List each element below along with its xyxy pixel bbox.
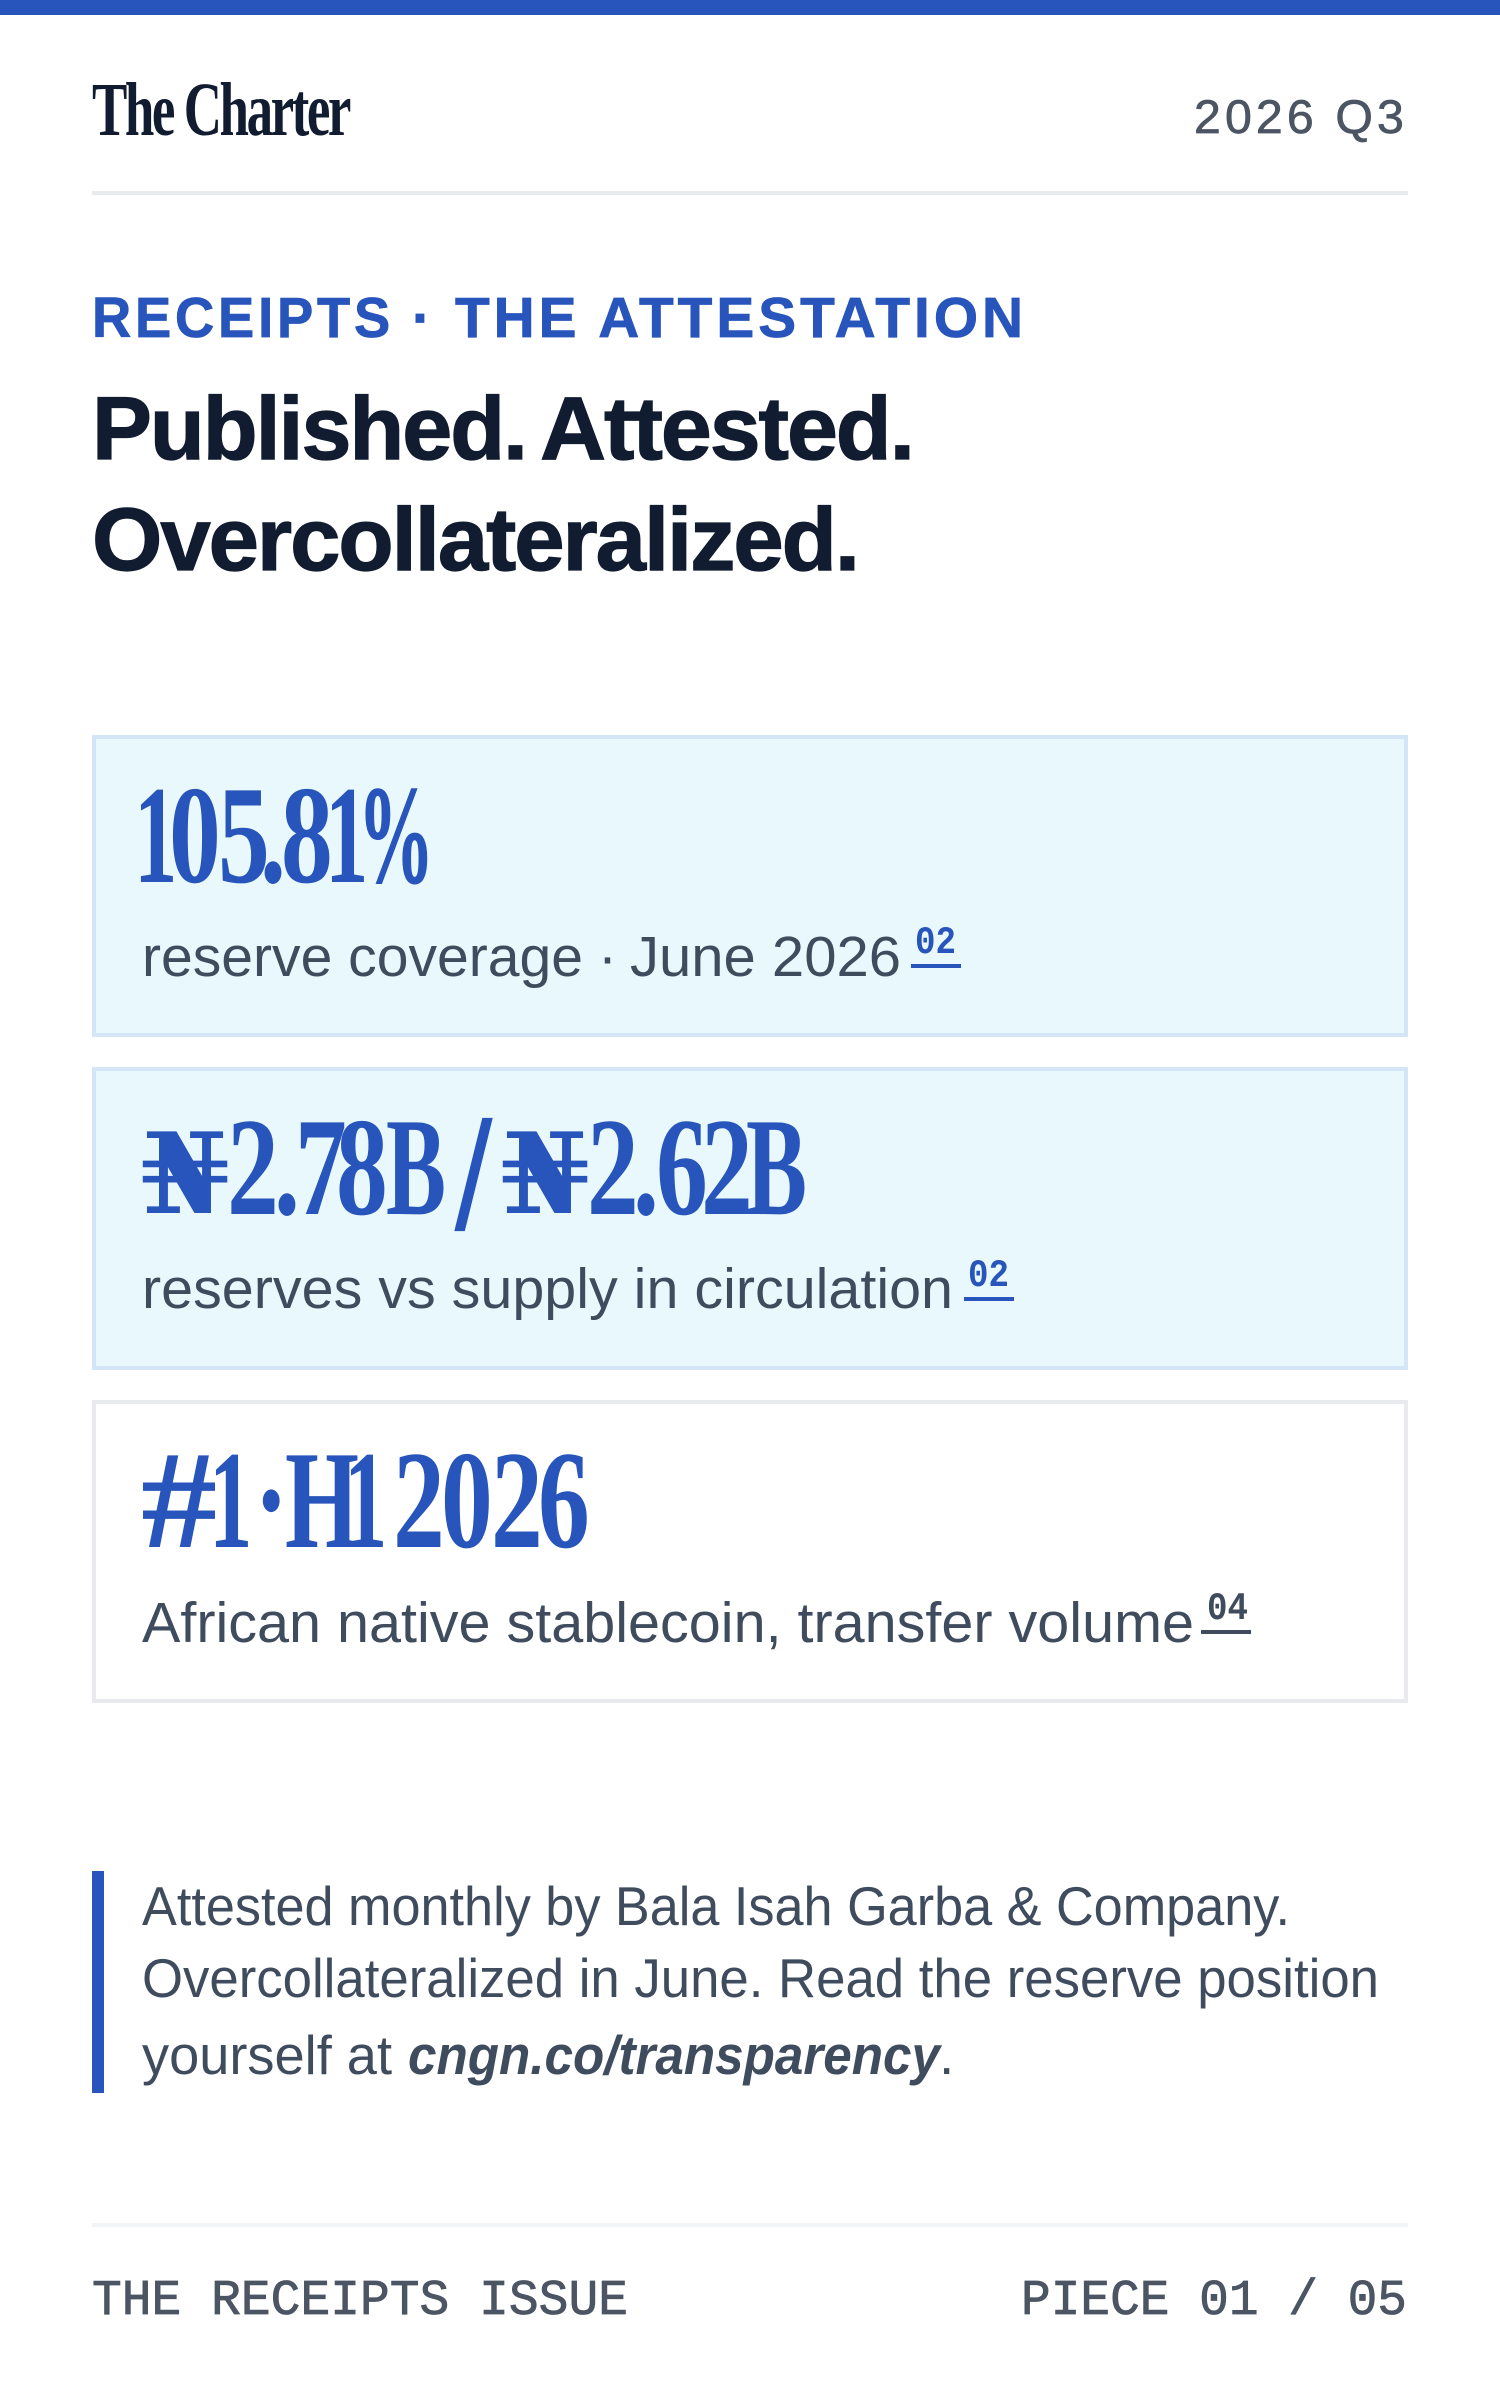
panel: reserves vs supply xyxy=(94,1069,1406,1368)
stat label: reserves vs supply in circulation xyxy=(142,1257,953,1321)
stat: reserves / supply: 2.62 xyxy=(587,1089,753,1245)
heading: Published. xyxy=(92,378,526,478)
eyebrow: RECEIPTS xyxy=(92,286,394,350)
callout: yourself at xyxy=(142,2024,392,2086)
stat: #1 H1 2026: # xyxy=(141,1423,217,1578)
stat: 105.81%: 1 xyxy=(134,758,177,913)
stat: #1 H1 2026: 1 xyxy=(344,1423,387,1578)
heading: Attested. xyxy=(540,378,913,478)
publication name: The Charter xyxy=(92,68,351,152)
panel: reserve coverage xyxy=(94,737,1406,1035)
footnote marker 02: 02 xyxy=(915,921,956,965)
footnote marker 02: 02 xyxy=(968,1254,1009,1298)
footer xyxy=(92,2273,1407,2330)
stat: #1 H1 2026: 1 xyxy=(209,1423,252,1578)
heading: Overcollateralized. xyxy=(92,489,858,589)
stat: 105.81%: 1 xyxy=(325,758,368,913)
heading xyxy=(92,378,913,589)
stat: reserves / supply xyxy=(140,1081,807,1264)
masthead xyxy=(92,68,1408,152)
callout: Attested monthly by Bala Isah Garba & Company. xyxy=(142,1875,1290,1937)
callout: Overcollateralized in June. Read the reserve position xyxy=(142,1947,1379,2009)
footer: THE RECEIPTS ISSUE xyxy=(92,2273,628,2330)
stat label: June 2026 xyxy=(630,925,901,989)
stat: 105.81%: % xyxy=(358,758,434,913)
stat: #1 H1 2026: H xyxy=(285,1423,359,1578)
stat label xyxy=(142,925,901,989)
stat: reserves / supply: B xyxy=(746,1090,807,1245)
eyebrow xyxy=(92,286,1027,350)
callout xyxy=(92,1871,1379,2093)
eyebrow: · xyxy=(412,286,431,350)
stat label: · xyxy=(598,925,617,989)
panel: transfer volume rank xyxy=(94,1402,1406,1701)
stat: reserves / supply: ₦ xyxy=(140,1109,230,1240)
callout: . xyxy=(939,2024,954,2086)
callout: cngn.co/transparency xyxy=(408,2024,942,2086)
issue date: 2026 Q3 xyxy=(1194,90,1408,143)
footnote marker 04: 04 xyxy=(1207,1587,1248,1631)
stat: 105.81%: 05.8 xyxy=(169,757,333,913)
eyebrow: THE ATTESTATION xyxy=(455,286,1027,350)
stat: #1 H1 2026 xyxy=(141,1422,590,1578)
stat: #1 H1 2026: 2026 xyxy=(393,1422,590,1578)
stat: #1 H1 2026: · xyxy=(254,1422,289,1578)
footer: PIECE 01 / 05 xyxy=(1021,2273,1407,2330)
stat: reserves / supply: / xyxy=(456,1081,492,1264)
stat: reserves / supply: ₦ xyxy=(500,1109,590,1240)
stat: reserves / supply: 2.78 xyxy=(227,1089,388,1245)
stat label: reserve coverage xyxy=(142,925,583,989)
stat: 105.81% xyxy=(134,757,434,913)
top accent bar xyxy=(0,0,1500,15)
stat label: African native stablecoin, transfer volume xyxy=(142,1591,1194,1655)
stat: reserves / supply: B xyxy=(386,1090,446,1245)
